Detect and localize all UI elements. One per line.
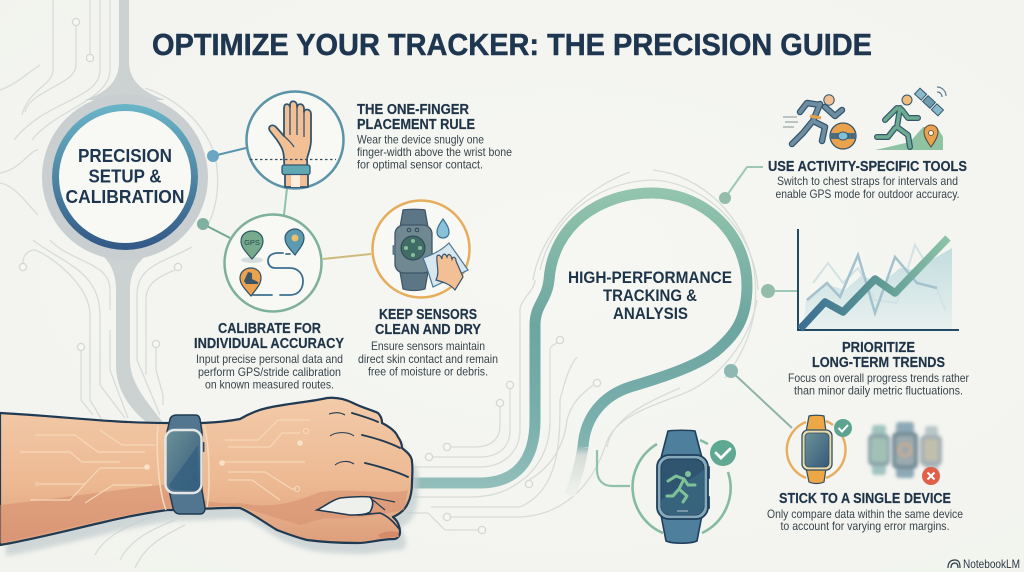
heading: High-Performance Tracking & Analysis: TRACKING &	[603, 286, 697, 305]
chart: long-term trend line	[798, 229, 959, 330]
text: calibrate for individual accuracy: perform GPS/stride calibration	[198, 365, 341, 379]
circuit lines: centre background	[407, 170, 758, 534]
panel: Precision Setup & Calibration hub: CALIBRATION	[66, 187, 184, 207]
text: prioritize long-term trends: Focus on overall progress trends rather	[788, 371, 969, 385]
text: stick to a single device	[767, 491, 963, 533]
text: keep sensors clean and dry: Ensure sensors maintain	[371, 339, 485, 353]
text: the one-finger placement rule: finger-width above the wrist bone	[357, 145, 512, 159]
icon: main running watch with check	[597, 430, 736, 543]
text: use activity-specific tools: Switch to chest straps for intervals and	[777, 174, 958, 188]
connectors: hub to step circles	[197, 148, 371, 259]
text: the one-finger placement rule	[357, 102, 512, 172]
icon: one-finger placement hand	[246, 92, 344, 188]
connectors: right column	[719, 167, 798, 428]
icon: blurred mixed devices with cross	[868, 422, 942, 485]
heading: High-Performance Tracking & Analysis	[568, 268, 732, 323]
text: use activity-specific tools	[768, 159, 967, 201]
text: calibrate for individual accuracy: CALIBRATE FOR	[218, 321, 321, 337]
panel: Precision Setup & Calibration hub: SETUP &	[88, 166, 162, 186]
text: keep sensors clean and dry: CLEAN AND DRY	[375, 322, 481, 338]
icon: GPS calibration route	[224, 214, 322, 312]
text: the one-finger placement rule: THE ONE-FINGER	[357, 102, 469, 118]
title: OPTIMIZE YOUR TRACKER: THE PRECISION GUIDE	[152, 27, 872, 62]
text: prioritize long-term trends	[788, 340, 969, 398]
text: calibrate for individual accuracy: on known measured routes.	[205, 378, 334, 392]
text: stick to a single device: to account for varying error margins.	[780, 519, 950, 533]
circuit lines: left background	[0, 0, 218, 568]
panel: Precision Setup & Calibration hub	[47, 99, 203, 255]
text: use activity-specific tools: enable GPS mode for outdoor accuracy.	[776, 187, 960, 201]
illustration: forearm and hand with watch	[0, 398, 412, 545]
shadow beneath the arm	[6, 409, 418, 556]
heading: High-Performance Tracking & Analysis: HIGH-PERFORMANCE	[568, 268, 732, 287]
text: calibrate for individual accuracy: Input precise personal data and	[196, 352, 343, 366]
text: prioritize long-term trends: than minor daily metric fluctuations.	[794, 384, 963, 398]
text: keep sensors clean and dry: KEEP SENSORS	[379, 307, 477, 323]
text: prioritize long-term trends: PRIORITIZE	[842, 340, 915, 356]
cut-out gap between thumb and fingers	[317, 497, 373, 515]
icon: GPS calibration route: GPS	[244, 238, 260, 247]
icon: single chosen watch with check	[787, 415, 852, 484]
text: prioritize long-term trends: LONG-TERM TRENDS	[812, 355, 945, 371]
text: the one-finger placement rule: Wear the device snugly one	[357, 132, 484, 146]
text: stick to a single device: Only compare data within the same device	[767, 507, 963, 521]
icon: cleaning watch sensors	[372, 200, 470, 298]
heading: High-Performance Tracking & Analysis: ANALYSIS	[613, 304, 688, 323]
panel: Precision Setup & Calibration hub: PRECISION	[78, 146, 172, 166]
text: calibrate for individual accuracy	[194, 321, 344, 392]
icon: GPS runner with satellite	[875, 87, 946, 150]
text: the one-finger placement rule: for optimal sensor contact.	[357, 158, 483, 172]
text: use activity-specific tools: USE ACTIVITY-SPECIFIC TOOLS	[768, 159, 967, 175]
text: calibrate for individual accuracy: INDIVIDUAL ACCURACY	[194, 336, 344, 352]
text: keep sensors clean and dry: direct skin contact and remain	[358, 352, 498, 366]
left stem connecting hub to wrist	[85, 0, 165, 425]
text: keep sensors clean and dry: free of moisture or debris.	[368, 364, 488, 378]
text: the one-finger placement rule: PLACEMENT RULE	[357, 117, 475, 133]
main tracking band	[410, 193, 747, 495]
text: keep sensors clean and dry	[358, 307, 498, 378]
watch on the wrist	[166, 415, 205, 514]
icon: runner with chest strap	[783, 95, 856, 149]
text: stick to a single device: STICK TO A SINGLE DEVICE	[779, 491, 951, 507]
